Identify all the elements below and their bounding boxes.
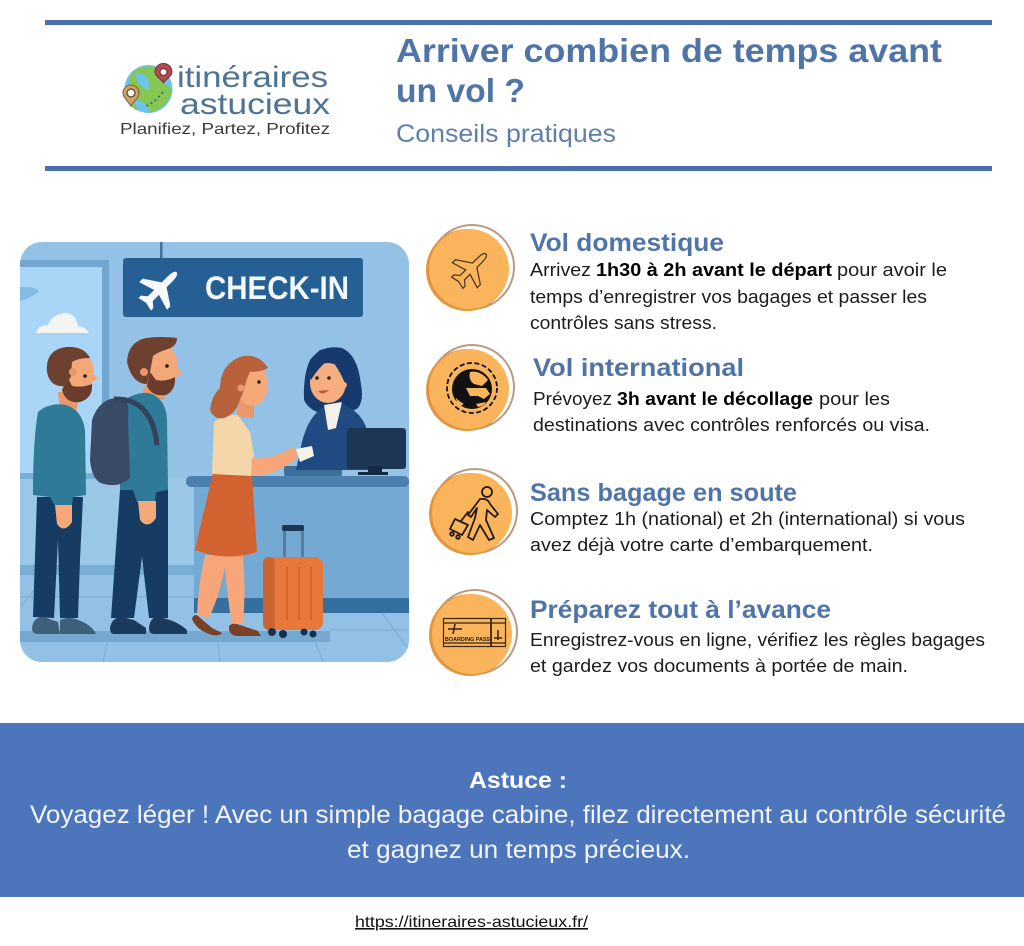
body text [530, 509, 965, 555]
tip text: Voyagez léger ! Avec un simple bagage cabine, filez directement au contrôle sécurité [30, 801, 1006, 829]
body text: temps d’enregistrer vos bagages et passer les [530, 287, 927, 307]
body text: 1h30 à 2h avant le départ [596, 260, 832, 280]
person 3: woman [192, 356, 314, 636]
tip heading: Astuce : [469, 767, 567, 793]
body text [530, 260, 947, 333]
heading: Vol international [533, 354, 744, 382]
logo tagline: Planifiez, Partez, Profitez [120, 121, 330, 138]
sign: CHECK-IN [205, 270, 349, 306]
person 2 [90, 337, 187, 634]
body text: Enregistrez-vous en ligne, vérifiez les règles bagages [530, 630, 985, 650]
body text: contrôles sans stress. [530, 313, 717, 333]
icon: boarding pass badge: BOARDING PASS [445, 637, 490, 643]
illustration: check-in counter [20, 242, 409, 662]
agent [296, 347, 370, 470]
body text: avez déjà votre carte d’embarquement. [530, 535, 873, 555]
suitcase [263, 525, 323, 638]
icon: globe badge [426, 345, 514, 431]
heading: Vol domestique [530, 229, 724, 257]
body text: pour les [819, 389, 890, 409]
counter [186, 466, 409, 613]
heading: Sans bagage en soute [530, 479, 797, 507]
subtitle: Conseils pratiques [396, 120, 616, 148]
title [396, 32, 942, 109]
body text: pour avoir le [837, 260, 947, 280]
person 1 [32, 347, 97, 634]
icon: traveller badge [429, 469, 517, 555]
logo wordmark [177, 61, 330, 121]
tip text: et gagnez un temps précieux. [347, 836, 690, 864]
item: vol domestique [426, 225, 947, 333]
tip banner [0, 723, 1024, 897]
tip text [30, 801, 1006, 864]
title: un vol ? [396, 72, 525, 109]
icon: globe with pins [123, 64, 172, 113]
body text [533, 389, 930, 435]
item: préparez tout à l'avance [429, 590, 985, 676]
body text: Arrivez [530, 260, 591, 280]
window [20, 260, 109, 473]
body text: Prévoyez [533, 389, 612, 409]
logo wordmark: astucieux [180, 88, 330, 121]
icon: boarding pass badge [429, 590, 517, 676]
icon: plane badge [426, 225, 514, 311]
footer link: https://itineraires-astucieux.fr/ [355, 914, 589, 931]
header band [45, 20, 992, 171]
icon: plane [138, 272, 178, 310]
body text: et gardez vos documents à portée de main. [530, 656, 908, 676]
body text [530, 630, 985, 676]
monitor [347, 428, 406, 475]
title: Arriver combien de temps avant [396, 32, 942, 69]
heading: Préparez tout à l’avance [530, 596, 831, 624]
logo [120, 61, 330, 138]
sign [123, 242, 363, 318]
floor [20, 590, 409, 662]
logo wordmark: itinéraires [177, 61, 328, 94]
body text: 3h avant le décollage [617, 389, 813, 409]
item: vol international [426, 345, 930, 435]
body text: destinations avec contrôles renforcés ou visa. [533, 415, 930, 435]
body text: Comptez 1h (national) et 2h (international) si vous [530, 509, 965, 529]
item: sans bagage en soute [429, 469, 965, 555]
